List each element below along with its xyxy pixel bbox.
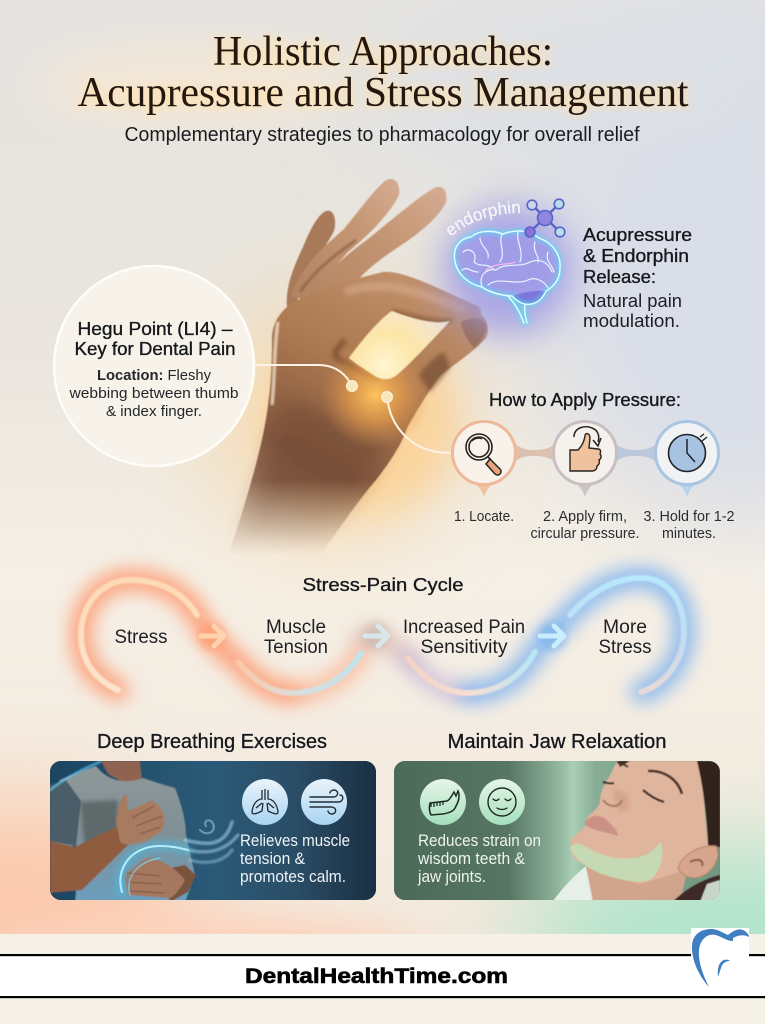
person [50, 761, 196, 902]
text: acupressure and endorphin release: Acupressure [583, 224, 692, 245]
steps diagram [452, 422, 718, 497]
left connector line [255, 365, 352, 386]
callout: Hegu Point [54, 266, 254, 466]
glow ribbons [81, 578, 684, 693]
stroke 4 [570, 578, 684, 692]
woman [570, 761, 720, 902]
label: more stress: More [603, 617, 647, 638]
text: breathing benefit: tension & [240, 849, 306, 868]
arrow 3 [538, 622, 566, 650]
text: jaw benefit: jaw joints. [417, 867, 486, 886]
jaw highlight [570, 842, 662, 882]
pressure point 2 [382, 392, 392, 402]
text: acupressure and endorphin release: modulation. [583, 310, 680, 331]
step labels: minutes. [662, 525, 716, 542]
knuckle shadow [336, 340, 380, 380]
icon: wind [301, 779, 347, 825]
callout: Hegu Point: Hegu Point (LI4) – [78, 319, 232, 339]
title: Holistic Approaches: [213, 29, 553, 74]
step labels [454, 508, 734, 542]
callout: Hegu Point: Key for Dental Pain [74, 339, 236, 359]
subtitle: Complementary strategies to pharmacology for overall relief [124, 124, 640, 146]
wrist highlight [272, 322, 278, 405]
label: increased pain sensitivity: Increased Pain [403, 617, 525, 638]
lips [585, 816, 618, 836]
panel: deep breathing [50, 761, 376, 902]
icon: lungs [242, 779, 288, 825]
pressure point 1 [346, 380, 358, 392]
step labels: 2. Apply firm, [543, 508, 627, 525]
title: Holistic Approaches: [213, 29, 553, 75]
stroke 3 [408, 652, 535, 693]
upper arm and forearm [50, 827, 128, 893]
heading: deep breathing exercises: Deep Breathing Exercises [97, 730, 327, 753]
icon: glowing brain with endorphin molecule: endorphin [447, 201, 520, 236]
arrow 1 [198, 622, 226, 650]
step 3 [656, 422, 718, 497]
label: muscle tension: Tension [264, 637, 328, 658]
upper hand [116, 794, 164, 845]
icon: calm face [479, 779, 525, 825]
callout: Hegu Point: & index finger. [106, 403, 202, 420]
endorphin label [451, 213, 522, 237]
lower hand [125, 858, 185, 898]
callout: Hegu Point: webbing between thumb [68, 385, 239, 402]
text: jaw benefit [417, 831, 541, 886]
title: Acupressure and Stress Management [78, 70, 688, 115]
nose shadow [603, 800, 622, 806]
sleeve [50, 780, 81, 846]
icon: jaw [420, 779, 466, 825]
stress-pain cycle diagram [81, 578, 684, 693]
step labels: circular pressure. [530, 525, 640, 542]
label: muscle tension: Muscle [266, 617, 326, 638]
text: breathing benefit: promotes calm. [240, 867, 346, 886]
step labels: 1. Locate. [454, 508, 514, 525]
footer url: DentalHealthTime.com [245, 965, 508, 988]
palm glow [326, 355, 425, 446]
label: increased pain sensitivity [403, 617, 525, 658]
label: stress: Stress [114, 627, 168, 648]
pillow [554, 866, 594, 900]
heading: maintain jaw relaxation: Maintain Jaw Relaxation [448, 730, 666, 753]
stroke 2 [238, 653, 361, 693]
callout: Hegu Point: Location: Fleshy [97, 367, 211, 384]
step 1 [452, 422, 516, 497]
footer band [0, 954, 765, 998]
ring finger [291, 179, 399, 300]
shirt [50, 766, 195, 902]
neck [100, 761, 142, 782]
neck [586, 866, 686, 900]
palm shading [240, 400, 385, 545]
icon: glowing brain with endorphin molecule [421, 186, 590, 354]
palm, index finger and thumb [228, 272, 488, 556]
text: breathing benefit: Relieves muscle [240, 831, 350, 850]
index finger highlight [345, 286, 465, 310]
hand glow [270, 325, 460, 515]
lower arm [168, 864, 196, 900]
label: more stress: Stress [598, 637, 652, 658]
breath swirl [50, 762, 238, 895]
opening between thumb and index [349, 311, 450, 379]
label: increased pain sensitivity: Sensitivity [420, 637, 508, 658]
step 2 [554, 422, 616, 497]
heading: how to apply pressure: How to Apply Pressure: [489, 390, 681, 410]
text: acupressure and endorphin release: Release: [583, 266, 656, 287]
closed eye [643, 790, 664, 802]
ear [678, 846, 718, 878]
shadow on forehead side [612, 790, 629, 812]
hair [697, 761, 720, 847]
eyebrow [648, 771, 682, 794]
molecule [525, 199, 565, 237]
text: acupressure and endorphin release [583, 224, 692, 331]
face [570, 761, 708, 884]
arrow 2 [362, 622, 390, 650]
text: acupressure and endorphin release: Natural pain [583, 290, 682, 311]
shirt shadow [80, 800, 118, 850]
text: jaw benefit: wisdom teeth & [417, 849, 526, 868]
right connector line [387, 397, 450, 453]
heading: stress-pain cycle: Stress-Pain Cycle [302, 574, 464, 595]
label: muscle tension [264, 617, 328, 658]
stroke 1 [81, 580, 197, 690]
text: jaw benefit: Reduces strain on [418, 831, 541, 850]
connectors [510, 440, 560, 466]
text: breathing benefit [240, 831, 350, 886]
hand [228, 179, 488, 556]
thumb nail shading [461, 318, 486, 348]
logo: tooth [691, 928, 749, 990]
title [78, 29, 689, 116]
title: Acupressure and Stress Management [78, 70, 689, 116]
text: acupressure and endorphin release: & Endorphin [583, 245, 689, 266]
middle finger [310, 186, 447, 294]
pinky finger [287, 211, 335, 308]
step labels: 3. Hold for 1-2 [644, 508, 734, 525]
label: more stress [598, 617, 652, 658]
hair and shadow behind neck [672, 875, 720, 902]
panel: jaw relaxation [394, 761, 720, 902]
